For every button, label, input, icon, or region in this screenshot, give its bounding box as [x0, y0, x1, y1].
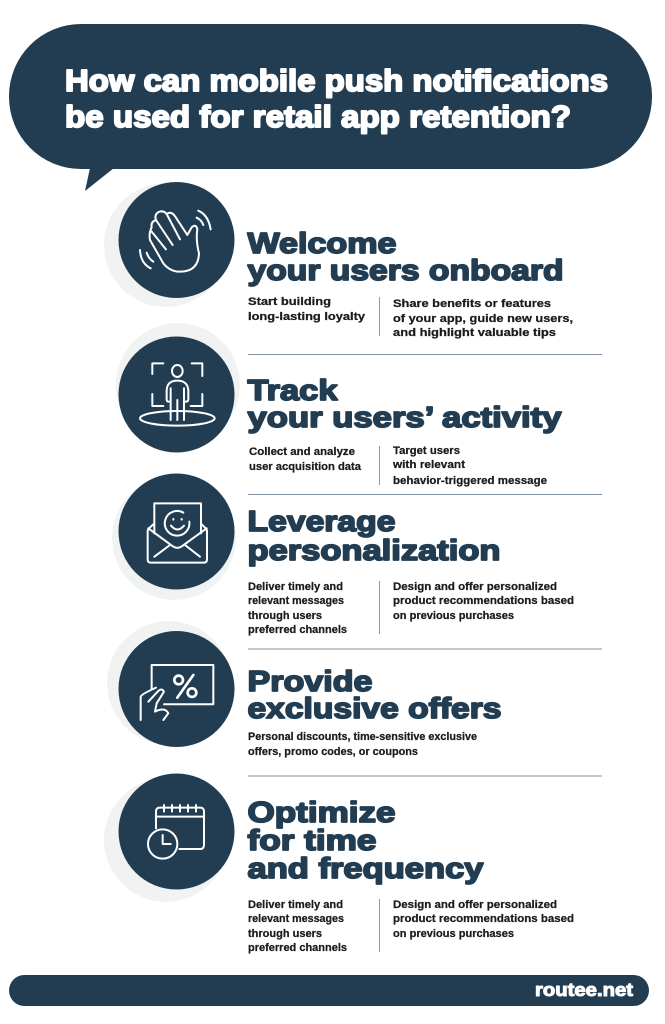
text: recommendations repeat	[393, 899, 574, 940]
text: timely messages repeat	[248, 899, 347, 954]
title: How can mobile push notifications	[65, 63, 608, 98]
heading: personalization: Leverage	[248, 506, 396, 538]
text: benefits: of your app, guide new users,	[393, 313, 573, 325]
heading: track: your users’ activity	[248, 402, 562, 434]
text: acquisition data: user acquisition data	[249, 461, 361, 473]
section: welcome	[104, 182, 602, 354]
text: timely messages: Deliver timely and	[248, 581, 343, 593]
heading: offers: Provide	[248, 666, 372, 698]
text: recommendations: product recommendations based	[393, 595, 574, 607]
heading: personalization: personalization	[248, 535, 500, 567]
title	[65, 63, 608, 134]
text: loyalty	[248, 296, 365, 323]
text: discounts: Personal discounts, time-sensitive exclusive	[248, 731, 477, 743]
heading: personalization	[248, 506, 500, 567]
footer bar	[9, 975, 649, 1006]
heading: welcome: Welcome	[248, 228, 396, 260]
text: target users: Target users	[393, 445, 460, 457]
text: target users	[392, 445, 547, 487]
heading: optimize: Optimize	[248, 797, 396, 829]
icon: hand holding discount card	[107, 621, 234, 747]
text: recommendations: Design and offer personalized	[393, 581, 557, 593]
title speech bubble	[9, 24, 652, 191]
text: recommendations: on previous purchases	[393, 610, 514, 622]
heading: offers: exclusive offers	[248, 693, 502, 725]
text: timely messages: relevant messages	[248, 595, 344, 607]
section: optimize	[104, 774, 574, 954]
text: recommendations	[393, 581, 574, 622]
heading: offers	[248, 666, 502, 725]
text: benefits	[393, 298, 573, 339]
heading: welcome: your users onboard	[248, 255, 564, 287]
text: recommendations repeat: product recommendations based	[393, 913, 574, 925]
heading: optimize	[248, 797, 484, 885]
icon: person scan	[116, 323, 240, 452]
text: target users: behavior-triggered message	[393, 475, 547, 487]
text: timely messages: preferred channels	[248, 624, 347, 636]
heading: track: Track	[248, 375, 339, 407]
text: benefits: Share benefits or features	[393, 298, 551, 310]
text: timely messages repeat: preferred channels	[248, 942, 347, 954]
text: timely messages repeat: relevant messages	[248, 913, 344, 925]
text: target users: with relevant	[392, 459, 466, 471]
heading: track	[248, 375, 562, 434]
heading: optimize: for time	[248, 825, 376, 857]
text: discounts	[248, 731, 477, 758]
text: timely messages	[248, 581, 347, 636]
section: offers	[107, 621, 602, 776]
text: acquisition data: Collect and analyze	[249, 446, 355, 458]
text: recommendations repeat: on previous purchases	[393, 928, 514, 940]
icon: envelope with smiley	[112, 474, 236, 600]
text: timely messages repeat: through users	[248, 928, 322, 940]
section: track	[116, 323, 602, 494]
text: discounts: offers, promo codes, or coupons	[248, 746, 418, 758]
text: timely messages repeat: Deliver timely and	[248, 899, 343, 911]
text: loyalty: Start building	[248, 296, 331, 308]
heading: optimize: and frequency	[248, 853, 484, 885]
icon: calendar and clock	[104, 774, 234, 902]
text: timely messages: through users	[248, 610, 322, 622]
heading: welcome	[248, 228, 564, 287]
title: be used for retail app retention?	[65, 99, 571, 134]
text: loyalty: long-lasting loyalty	[248, 311, 365, 323]
section: personalization	[112, 474, 602, 649]
logo text: routee.net	[535, 980, 633, 1000]
text: benefits: and highlight valuable tips	[393, 327, 556, 339]
text: recommendations repeat: Design and offer personalized	[393, 899, 557, 911]
text: acquisition data	[249, 446, 361, 473]
icon: waving hand	[104, 182, 234, 307]
